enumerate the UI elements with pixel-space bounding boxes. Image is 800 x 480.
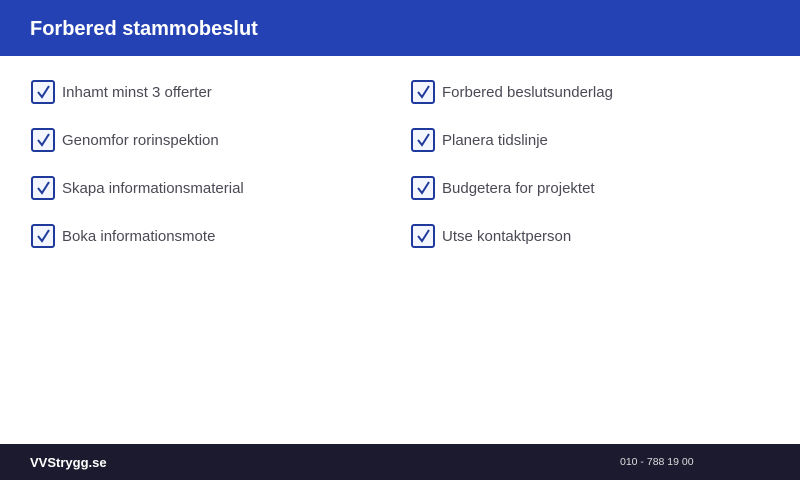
- checklist item: [411, 176, 595, 200]
- checklist item: [31, 224, 215, 248]
- checklist item: Inhamt minst 3 offerter: [62, 84, 212, 101]
- checklist item: Skapa informationsmaterial: [62, 180, 244, 197]
- title: Forbered stammobeslut: [30, 18, 258, 40]
- checklist item: Utse kontaktperson: [442, 228, 571, 245]
- checklist item: [411, 80, 613, 104]
- header: [0, 0, 800, 56]
- checklist item: Forbered beslutsunderlag: [442, 84, 613, 101]
- footer: VVStrygg.se: [30, 455, 107, 470]
- checklist item: [31, 128, 219, 152]
- checklist item: Planera tidslinje: [442, 132, 548, 149]
- checklist item: Budgetera for projektet: [442, 180, 595, 197]
- checklist item: Boka informationsmote: [62, 228, 215, 245]
- footer: [0, 444, 800, 480]
- checklist item: [411, 128, 548, 152]
- footer: 010 - 788 19 00: [620, 456, 694, 468]
- checklist item: Genomfor rorinspektion: [62, 132, 219, 149]
- checklist item: [31, 176, 244, 200]
- checklist item: [411, 224, 571, 248]
- checklist item: [31, 80, 212, 104]
